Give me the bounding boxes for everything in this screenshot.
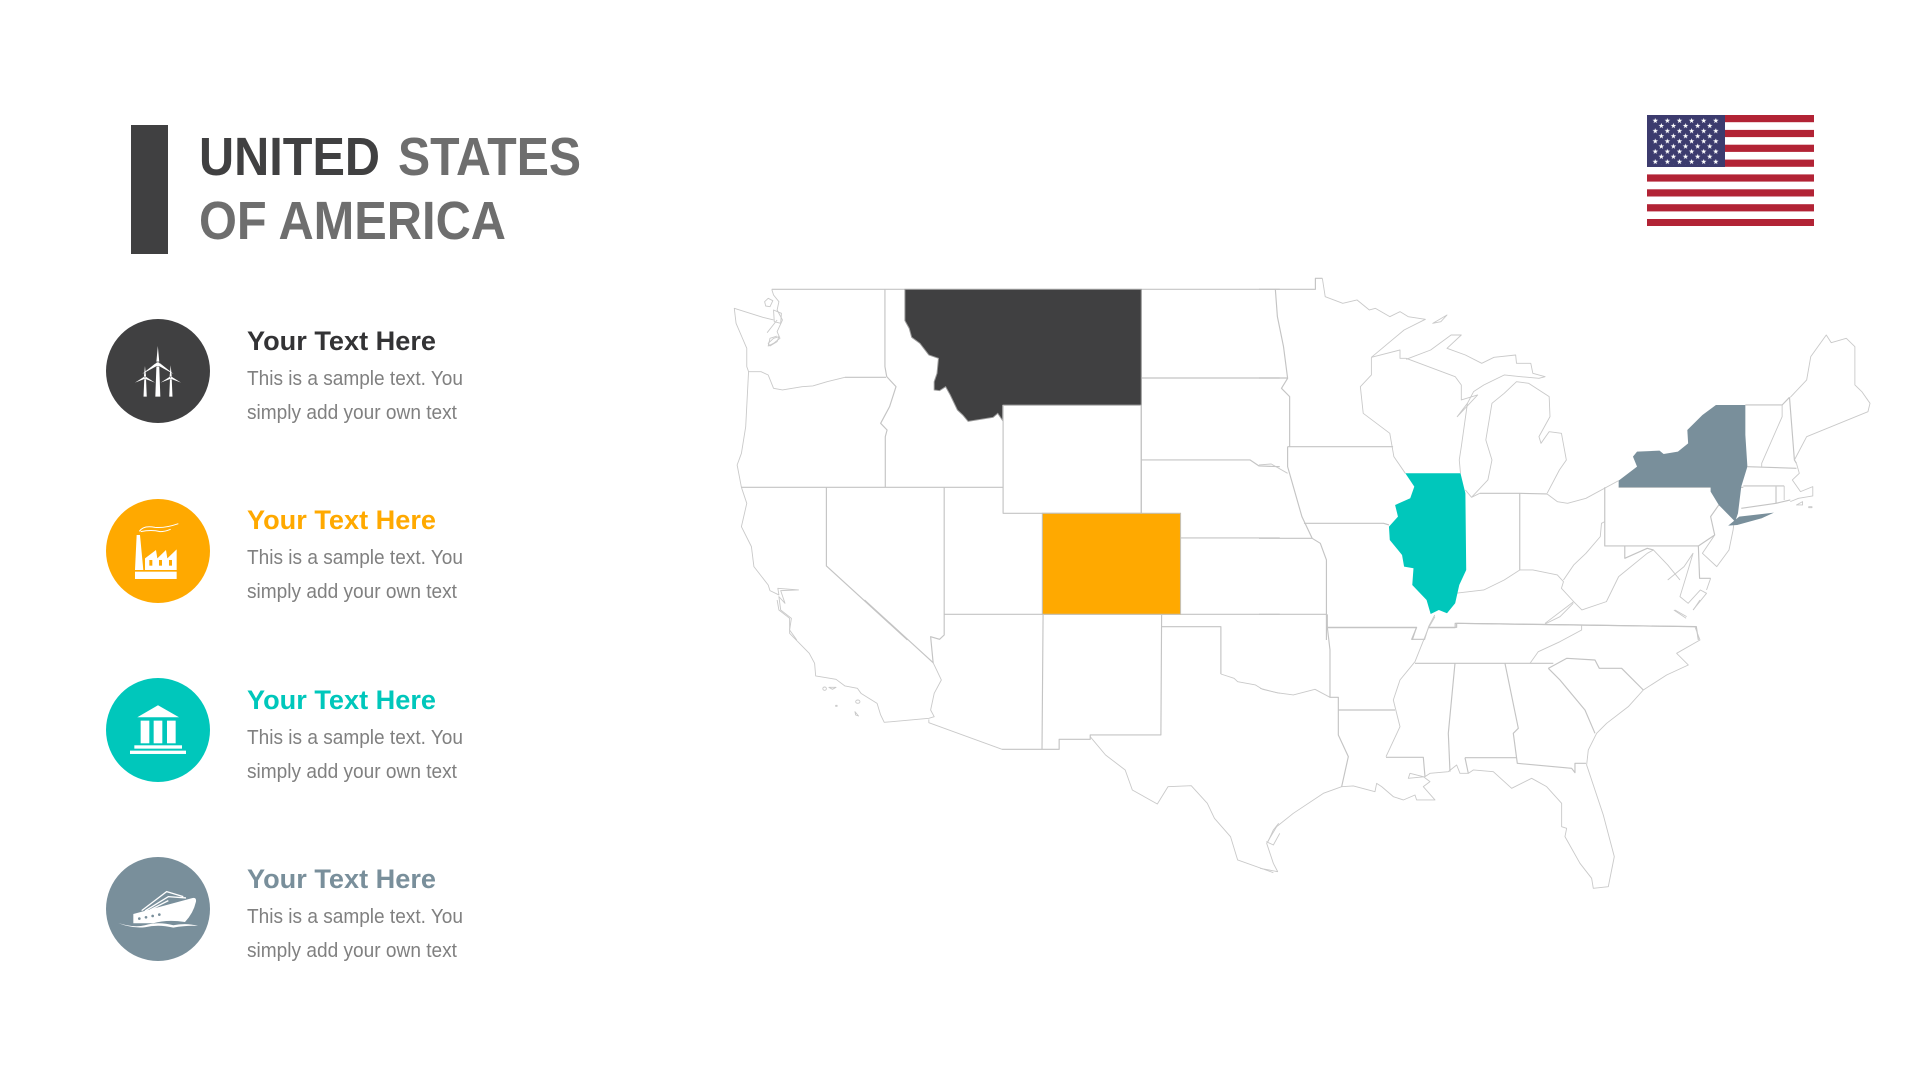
- body text: [247, 906, 463, 962]
- icon: factory: [106, 499, 210, 603]
- body text: simply add your own text: [247, 940, 457, 962]
- list item: ship: [106, 857, 463, 962]
- body text: simply add your own text: [247, 761, 457, 783]
- map: western states: [734, 289, 1280, 640]
- body text: This is a sample text. You: [247, 906, 463, 928]
- state: Illinois: [1389, 473, 1466, 614]
- state: Wyoming: [1003, 405, 1141, 513]
- heading: Your Text Here: [247, 685, 436, 715]
- map: southwestern states: [777, 600, 1280, 873]
- map of the United States: [734, 278, 1870, 888]
- icon: cruise ship: [106, 857, 210, 961]
- icon: wind turbines: [106, 319, 210, 423]
- list item: bank: [106, 678, 463, 783]
- map: southeastern states: [1260, 600, 1700, 888]
- title: OF AMERICA: [199, 191, 506, 251]
- list item: factory: [106, 499, 463, 603]
- heading: Your Text Here: [247, 326, 436, 356]
- body text: This is a sample text. You: [247, 368, 463, 390]
- map: midwest and northeast: [1259, 278, 1870, 640]
- state: New York: [1619, 405, 1774, 526]
- icon: classical building: [106, 678, 210, 782]
- state: Colorado: [1042, 513, 1181, 614]
- body text: simply add your own text: [247, 402, 457, 424]
- body text: This is a sample text. You: [247, 727, 463, 749]
- state: Montana: [905, 289, 1141, 421]
- body text: [247, 727, 463, 783]
- list item: wind energy: [106, 319, 463, 424]
- body text: simply add your own text: [247, 581, 457, 603]
- body text: [247, 368, 463, 424]
- title accent bar: [131, 125, 168, 254]
- body text: This is a sample text. You: [247, 547, 463, 569]
- title: [199, 127, 581, 251]
- title: UNITED: [199, 127, 380, 187]
- icon: american flag: [1647, 115, 1814, 226]
- body text: [247, 547, 463, 603]
- heading: Your Text Here: [247, 505, 436, 535]
- heading: Your Text Here: [247, 864, 436, 894]
- title: STATES: [398, 127, 581, 187]
